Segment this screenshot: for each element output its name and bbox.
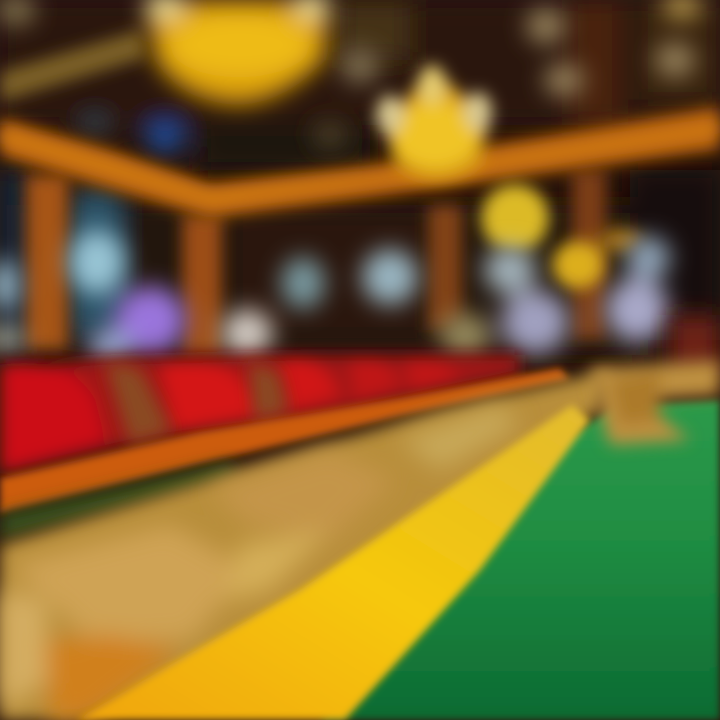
gold table surface xyxy=(0,370,610,720)
upper left beam xyxy=(0,30,145,102)
lower wall and windows band xyxy=(0,170,720,355)
chandelier: top xyxy=(145,0,330,105)
chandelier: right xyxy=(481,184,642,289)
right background xyxy=(670,315,720,375)
orange ceiling beam xyxy=(0,106,720,218)
yellow table stripe xyxy=(75,405,590,720)
gold pieces right xyxy=(590,360,720,445)
ceiling panels xyxy=(0,0,720,170)
seat gaps xyxy=(105,362,288,444)
dark green table edge xyxy=(0,462,240,540)
red seats row xyxy=(0,355,520,475)
orange table rim xyxy=(0,368,570,514)
columns xyxy=(26,170,606,355)
green felt xyxy=(320,400,720,720)
chandelier: middle xyxy=(376,65,492,180)
ceiling lights xyxy=(0,0,702,149)
glowing windows xyxy=(0,230,670,361)
gold chip stacks xyxy=(0,405,520,720)
